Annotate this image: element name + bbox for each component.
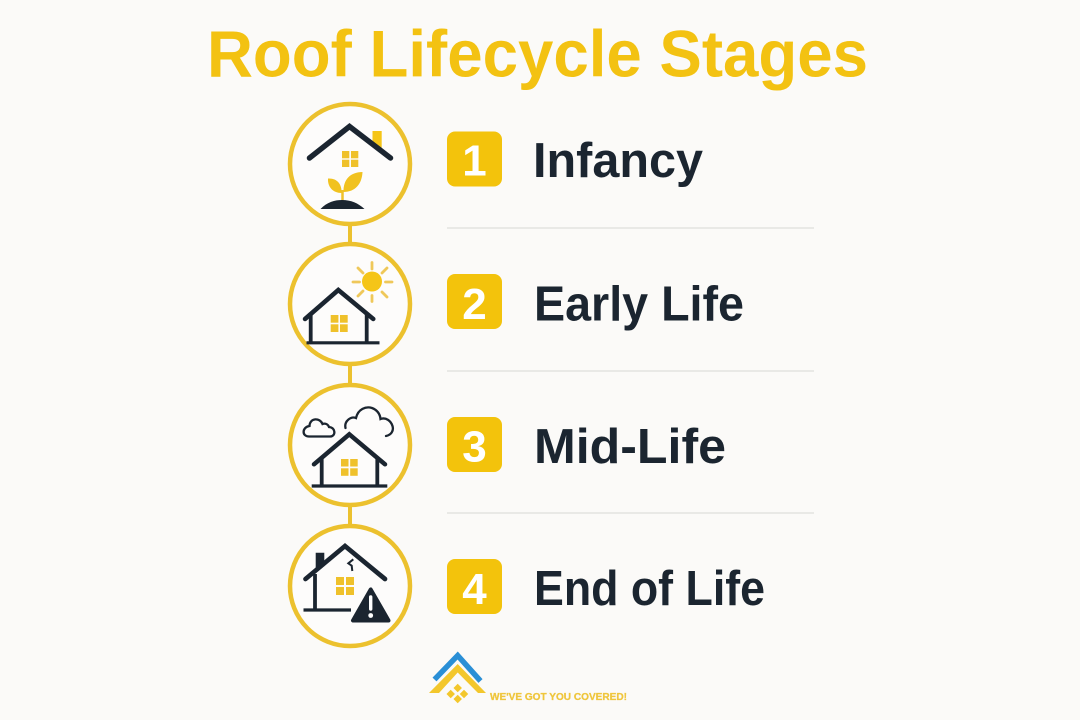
stage 2 row: [447, 274, 744, 332]
label: Early Life: Early Life: [534, 278, 744, 332]
badge 1: 1: [462, 136, 487, 186]
label: End of Life: End of Life: [534, 562, 765, 616]
footer logo: [429, 656, 486, 703]
icon: warning triangle: [353, 590, 388, 620]
badge 1: [447, 132, 502, 186]
stage 4 row: [447, 559, 765, 616]
badge 2: 2: [462, 280, 487, 329]
badge 3: 3: [462, 422, 487, 472]
badge 2: [447, 274, 502, 329]
label: Infancy: Infancy: [533, 134, 703, 188]
title: Roof Lifecycle Stages: [207, 16, 868, 90]
stage 3 row: [447, 417, 726, 474]
badge 4: 4: [462, 565, 487, 614]
stage 1 row: [447, 132, 703, 188]
icon: infancy, roof with seedling: [290, 104, 410, 224]
footer tagline: WE'VE GOT YOU COVERED!: [490, 691, 627, 703]
timeline connectors: [348, 226, 352, 524]
icon: early life, house with sun: [290, 244, 410, 364]
icon: mid-life, house with clouds: [290, 385, 410, 505]
label: Mid-Life: Mid-Life: [534, 420, 726, 474]
badge 3: [447, 417, 502, 472]
badge 4: [447, 559, 502, 614]
icon: end of life, cracked house with warning: [290, 526, 410, 646]
